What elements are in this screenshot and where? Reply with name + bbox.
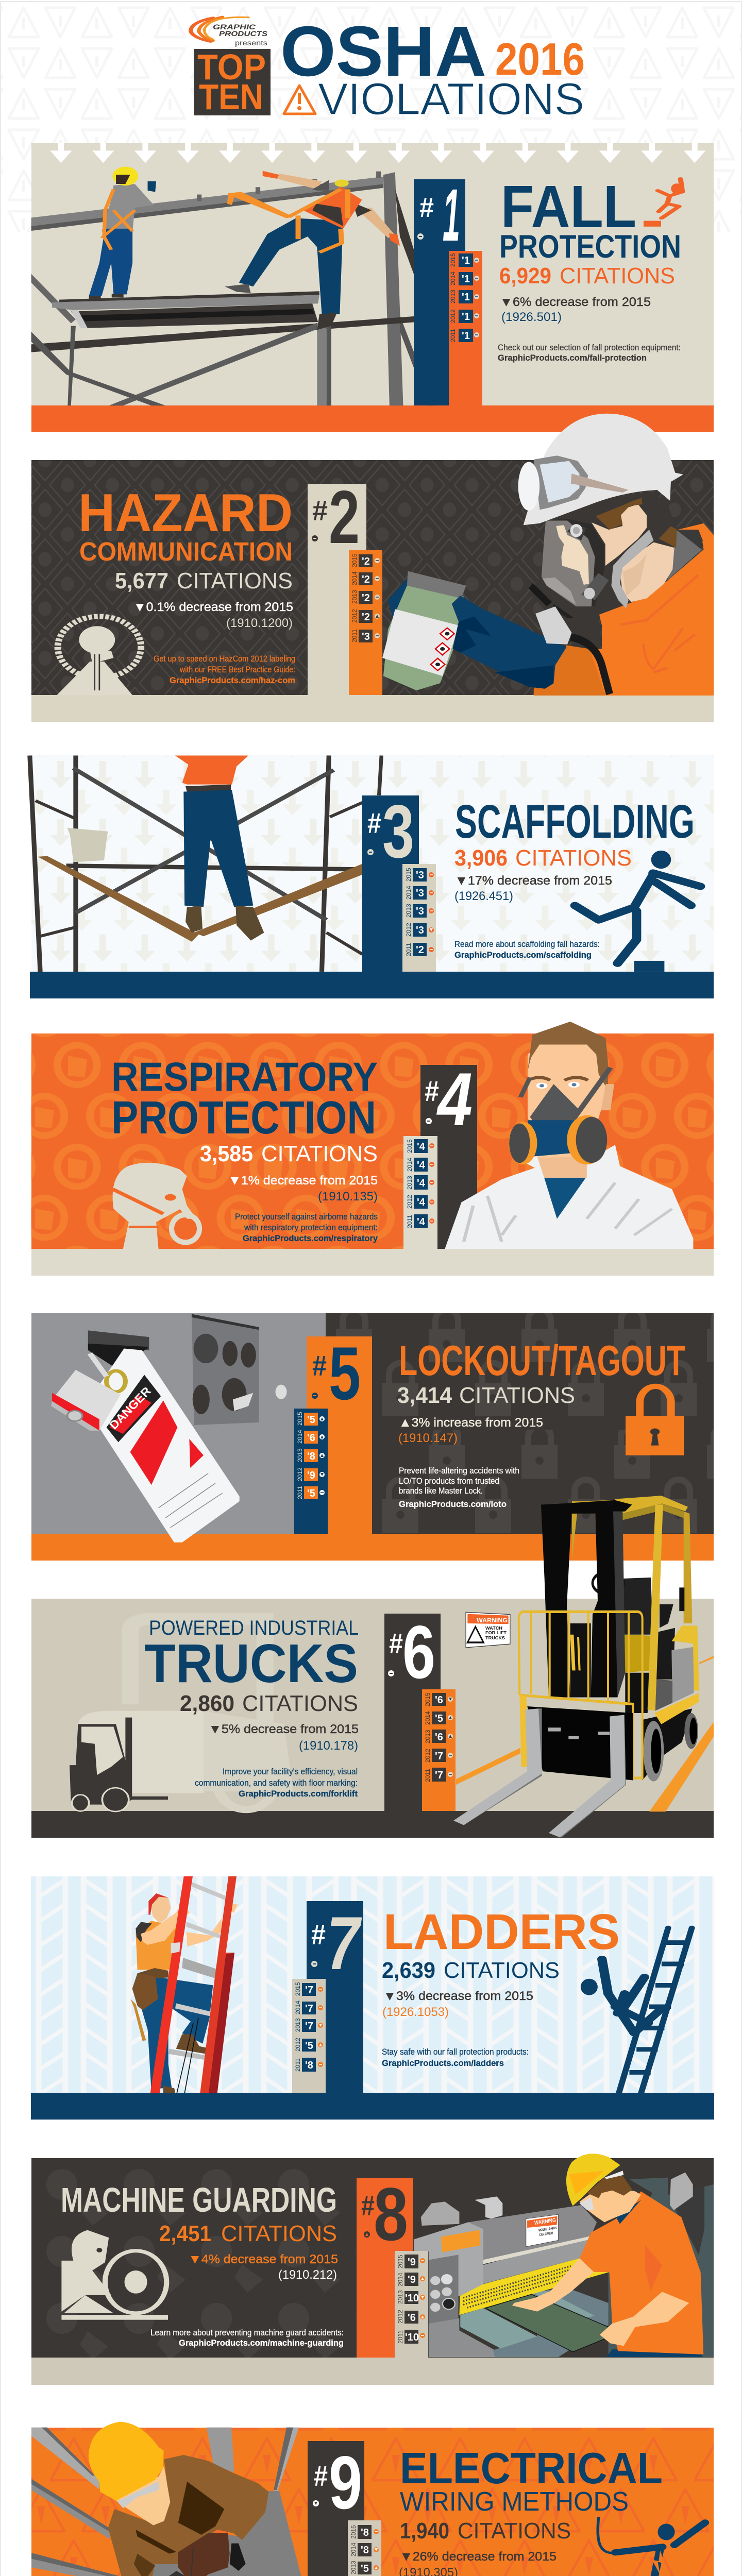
standard number: (1910.147) — [398, 1431, 458, 1445]
heading: COMMUNICATION — [79, 537, 293, 566]
illustration: worker at shear machine — [414, 2154, 714, 2357]
rank history: '2 — [362, 574, 370, 585]
illustration: worker in suit and face shield — [452, 414, 714, 696]
panel 8: machine guarding — [31, 2154, 714, 2385]
rank history: 2012 — [397, 2310, 404, 2324]
rank history: '7 — [435, 1770, 443, 1781]
rank history: '7 — [435, 1751, 443, 1762]
rank history: 2012 — [294, 2038, 301, 2052]
warning sign text: WARNING — [534, 2217, 556, 2226]
rank tower: 7 — [327, 1901, 362, 1985]
heading: ELECTRICAL — [400, 2444, 663, 2493]
citations — [180, 1691, 358, 1716]
citations — [200, 1141, 378, 1166]
rank history — [395, 2251, 428, 2358]
panel 7: ladders — [31, 1876, 714, 2120]
panel 2: hazard communication — [31, 414, 714, 722]
rank history: '5 — [307, 1414, 315, 1426]
citations: 2,860 — [180, 1691, 234, 1716]
rank history: '6 — [435, 1694, 443, 1706]
rank history: '3 — [416, 870, 424, 881]
citations — [397, 1383, 575, 1408]
citations — [159, 2221, 337, 2246]
citations: CITATIONS — [221, 2221, 337, 2246]
icon: falling person — [644, 179, 682, 227]
link text: brands like Master Lock. — [399, 1486, 483, 1496]
rank history: '8 — [307, 1451, 315, 1462]
rank history: '3 — [416, 888, 424, 899]
rank history: '7 — [305, 2003, 313, 2014]
rank history — [422, 1689, 456, 1811]
logo: graphic products small: GRAPHIC — [213, 23, 256, 31]
link text: LO/TO products from trusted — [399, 1476, 499, 1486]
citations: 1,940 — [400, 2518, 449, 2544]
link text: Get up to speed on HazCom 2012 labeling — [154, 654, 295, 664]
change stat: ▼0.1% decrease from 2015 — [133, 600, 293, 614]
link text: Protect yourself against airborne hazards — [235, 1212, 378, 1222]
rank history: 2013 — [296, 1448, 303, 1462]
standard number: (1926.451) — [454, 889, 513, 903]
rank history: 2011 — [449, 329, 457, 342]
standard number: (1910.1200) — [226, 616, 293, 630]
heading: WIRING METHODS — [400, 2487, 629, 2517]
rank history: '1 — [462, 292, 470, 303]
rank history: '10 — [405, 2332, 419, 2343]
rank history: '6 — [435, 1732, 443, 1743]
rank history: '6 — [408, 2312, 416, 2324]
citations: CITATIONS — [177, 568, 293, 594]
link text: Prevent life-altering accidents with — [399, 1466, 519, 1476]
panel 6: powered industrial trucks — [31, 1496, 714, 1838]
rank history: 2015 — [294, 1982, 301, 1996]
rank tower: 8 — [374, 2172, 408, 2256]
illustration: chemical jar — [382, 571, 466, 690]
citations: 3,906 — [454, 845, 508, 871]
heading — [78, 483, 293, 566]
rank history: 2014 — [449, 272, 457, 285]
rank tower — [308, 475, 366, 695]
rank history: 2012 — [296, 1467, 303, 1481]
standard number: (1926.1053) — [382, 2005, 449, 2019]
rank history: 2011 — [397, 2330, 404, 2344]
citations: 2,451 — [159, 2221, 211, 2246]
link text: with respiratory protection equipment: — [244, 1223, 378, 1232]
warning sign text: CAN CRUSH — [539, 2232, 553, 2237]
change stat: ▼4% decrease from 2015 — [189, 2252, 338, 2266]
icon: padlock — [626, 1386, 684, 1455]
logo: graphic products small: presents — [235, 39, 267, 47]
rank history: '5 — [435, 1713, 443, 1724]
rank history: 2012 — [351, 609, 358, 623]
rank history — [402, 864, 436, 972]
rank history — [403, 1136, 437, 1249]
header — [191, 12, 585, 124]
change stat: ▲3% increase from 2015 — [399, 1416, 543, 1430]
link text: GraphicProducts.com/forklift — [239, 1789, 358, 1799]
rank history: 2012 — [424, 1749, 431, 1762]
rank history: '4 — [417, 1216, 426, 1228]
heading: RESPIRATORY — [111, 1054, 378, 1099]
citations — [454, 845, 632, 871]
rank history: '4 — [417, 1141, 426, 1153]
rank history: '1 — [462, 311, 470, 323]
citations — [382, 1958, 560, 1983]
citations: 5,677 — [115, 568, 168, 594]
illustration: worker climbing red ladder — [130, 1876, 238, 2093]
rank tower: # — [311, 1918, 326, 1951]
illustration: electrician wiring from above — [31, 2422, 307, 2576]
icon: forklift silhouette — [70, 1718, 168, 1811]
citations: CITATIONS — [242, 1691, 358, 1716]
heading: HAZARD — [78, 483, 293, 543]
change stat: ▼26% decrease from 2015 — [400, 2550, 556, 2564]
rank history — [294, 1409, 328, 1534]
rank tower: 6 — [402, 1610, 435, 1694]
top ten badge — [194, 47, 271, 117]
rank tower: 1 — [443, 174, 460, 257]
rank history: 2014 — [406, 1158, 413, 1172]
rank history: '4 — [417, 1197, 426, 1208]
change stat: ▼3% decrease from 2015 — [383, 1989, 533, 2003]
rank history: 2013 — [449, 290, 457, 303]
rank history: '5 — [307, 1488, 315, 1499]
link text — [454, 939, 600, 960]
logo: graphic products small: PRODUCTS — [219, 29, 268, 38]
rank history: '1 — [462, 274, 470, 285]
link text: with our FREE Best Practice Guide: — [179, 665, 295, 674]
rank tower: # — [312, 494, 328, 527]
citations: CITATIONS — [458, 2518, 571, 2544]
rank history: 2011 — [405, 943, 412, 956]
rank history: '1 — [462, 255, 470, 266]
citations: CITATIONS — [459, 1383, 575, 1408]
warning floor sign: FOR LIFT — [485, 1631, 507, 1635]
change stat: ▼6% decrease from 2015 — [500, 295, 651, 309]
link text: GraphicProducts.com/haz-com — [170, 675, 295, 685]
rank history: 2015 — [406, 1139, 413, 1153]
rank history: '8 — [361, 2527, 369, 2538]
danger tag word: DANGER — [107, 1384, 154, 1432]
rank history: '9 — [408, 2274, 416, 2285]
illustration: control panel and danger tag — [51, 1314, 287, 1543]
rank tower: 2 — [329, 475, 360, 559]
rank history: 2014 — [397, 2273, 404, 2286]
rank history: 2011 — [406, 1215, 413, 1228]
rank history: 2013 — [405, 904, 412, 918]
change stat: ▼5% decrease from 2015 — [209, 1722, 359, 1736]
rank history: 2013 — [406, 1176, 413, 1190]
icon: slipping person — [575, 851, 700, 972]
rank tower: # — [419, 192, 434, 223]
top ten badge: TOP — [197, 47, 266, 87]
rank history: '3 — [416, 925, 424, 936]
link text: Learn more about preventing machine guard accidents: — [150, 2328, 344, 2337]
rank tower: # — [312, 1349, 327, 1382]
rank history: 2013 — [351, 590, 358, 604]
standard number: (1910.178) — [299, 1739, 358, 1753]
rank tower — [307, 1901, 363, 2093]
rank tower — [362, 789, 419, 972]
warning floor sign: WARNING — [477, 1617, 508, 1624]
link text — [399, 1466, 519, 1509]
rank history: 2012 — [405, 923, 412, 937]
warning floor sign — [466, 1612, 510, 1648]
rank history: '6 — [307, 1432, 315, 1444]
rank history: 2013 — [424, 1730, 431, 1743]
rank history: 2013 — [294, 2018, 301, 2032]
warning sign text — [534, 2217, 558, 2238]
citations: CITATIONS — [444, 1958, 560, 1983]
citations — [400, 2518, 571, 2544]
rank tower: # — [314, 2460, 328, 2492]
rank history: '8 — [305, 2060, 313, 2071]
standard number: (1910.212) — [278, 2268, 337, 2282]
icon: falling ladder — [581, 1928, 692, 2093]
link text: GraphicProducts.com/ladders — [382, 2058, 504, 2068]
icon: respirator head — [113, 1163, 202, 1249]
heading — [499, 173, 681, 265]
title VIOLATIONS: VIOLATIONS — [318, 74, 584, 124]
heading: PROTECTION — [111, 1092, 376, 1144]
rank tower — [420, 1057, 477, 1249]
rank tower: 5 — [329, 1331, 361, 1415]
standard number: (1926.501) — [501, 310, 562, 324]
rank history — [349, 550, 382, 695]
panel 9: electrical wiring methods — [31, 2422, 714, 2576]
rank tower: 4 — [436, 1057, 473, 1141]
heading: POWERED INDUSTRIAL — [149, 1617, 359, 1639]
link text — [195, 1767, 358, 1799]
warning floor sign: TRUCKS — [485, 1636, 505, 1640]
down arrows row — [50, 143, 705, 163]
rank history: '5 — [361, 2563, 369, 2574]
panel 4: respiratory protection — [31, 1022, 714, 1276]
link text — [235, 1212, 378, 1243]
link text: Check out our selection of fall protection equipment: — [498, 343, 681, 352]
illustration: worker on scaffold plank — [30, 755, 381, 972]
citations: CITATIONS — [261, 1141, 378, 1166]
rank history: 2013 — [350, 2561, 357, 2574]
rank tower — [384, 1610, 441, 1811]
panel 3: scaffolding — [30, 755, 714, 998]
heading — [400, 2444, 663, 2517]
heading: FALL — [501, 173, 636, 240]
citations: 3,414 — [397, 1383, 452, 1408]
rank history: '9 — [408, 2257, 416, 2268]
rank tower: 9 — [329, 2441, 362, 2524]
panel 5: lockout tagout — [31, 1313, 714, 1561]
rank history: '7 — [305, 2021, 313, 2032]
rank history: 2014 — [351, 571, 358, 585]
rank history: 2014 — [294, 2001, 301, 2014]
rank tower: 3 — [382, 789, 414, 873]
rank history: 2012 — [406, 1195, 413, 1209]
link text: GraphicProducts.com/loto — [399, 1499, 507, 1509]
citations: CITATIONS — [560, 263, 675, 289]
rank history: '8 — [361, 2545, 369, 2556]
rank history: 2015 — [449, 253, 457, 267]
ghost forklift background — [78, 1619, 293, 1809]
rank history: 2015 — [296, 1412, 303, 1426]
rank history: '5 — [305, 2040, 313, 2052]
rank history: '2 — [362, 612, 370, 623]
link text: Read more about scaffolding fall hazards: — [454, 939, 600, 949]
link text: Improve your facility's efficiency, visual — [223, 1767, 358, 1776]
link text: GraphicProducts.com/scaffolding — [454, 950, 592, 960]
link text: GraphicProducts.com/respiratory — [243, 1233, 378, 1243]
rank history: 2015 — [351, 553, 358, 567]
illustration: yellow forklift — [453, 1496, 714, 1837]
rank history: '1 — [462, 330, 470, 342]
rank history: 2011 — [296, 1486, 303, 1499]
illustration: worker with respirator — [445, 1022, 693, 1249]
rank history: 2012 — [449, 309, 457, 323]
link text: Stay safe with our fall protection products: — [382, 2047, 529, 2057]
icon: warning triangle — [284, 86, 315, 114]
link text: GraphicProducts.com/fall-protection — [498, 353, 647, 363]
title year: 2016 — [495, 33, 585, 84]
logo: graphic products small — [191, 17, 268, 47]
rank history: '7 — [305, 1985, 313, 1996]
rank history: 2015 — [350, 2525, 357, 2539]
rank history: 2014 — [405, 886, 412, 900]
rank history: 2011 — [424, 1769, 431, 1782]
citations: CITATIONS — [515, 845, 632, 871]
link text: GraphicProducts.com/machine-guarding — [179, 2338, 344, 2348]
link text — [154, 654, 295, 685]
citations: 6,929 — [499, 263, 551, 289]
standard number: (1910.135) — [318, 1190, 378, 1204]
title OSHA: OSHA — [280, 12, 486, 91]
rank history: '3 — [416, 906, 424, 917]
rank tower — [357, 2172, 413, 2358]
rank tower — [307, 1331, 372, 1534]
change stat: ▼17% decrease from 2015 — [455, 874, 612, 888]
top ten badge: TEN — [199, 77, 263, 117]
rank history: '3 — [362, 631, 370, 642]
citations — [115, 568, 293, 594]
rank history — [449, 251, 482, 405]
rank history: 2014 — [350, 2543, 357, 2556]
rank history: 2011 — [351, 629, 358, 642]
rank history: '2 — [362, 556, 370, 567]
rank tower: # — [425, 1075, 439, 1107]
panel 1: fall protection — [31, 143, 714, 432]
heading: TRUCKS — [144, 1633, 358, 1694]
link text — [150, 2328, 344, 2348]
heading: LADDERS — [383, 1904, 620, 1960]
citations — [499, 263, 675, 289]
rank tower: # — [367, 807, 381, 839]
rank history — [292, 1979, 326, 2093]
rank history: '2 — [416, 944, 424, 956]
warning floor sign: WATCH — [485, 1626, 502, 1631]
citations: 3,585 — [200, 1141, 253, 1166]
rank history: 2013 — [397, 2290, 404, 2304]
rank history: '4 — [417, 1160, 426, 1171]
rank tower — [414, 174, 465, 405]
icon: machine entanglement — [61, 2230, 168, 2320]
link text: communication, and safety with floor marking: — [195, 1778, 358, 1788]
link text — [382, 2047, 529, 2068]
rank history: 2011 — [294, 2058, 301, 2072]
rank history: 2015 — [424, 1692, 431, 1706]
rank history: 2015 — [397, 2255, 404, 2268]
rank tower — [308, 2441, 364, 2576]
link text — [498, 343, 681, 363]
rank tower: # — [389, 1627, 403, 1659]
icon: inhalation hazard — [57, 616, 141, 695]
rank history: '4 — [417, 1178, 426, 1189]
rank tower: # — [361, 2189, 375, 2222]
rank history: '2 — [362, 592, 370, 604]
rank history: '10 — [405, 2293, 419, 2304]
heading — [111, 1054, 378, 1144]
illustration: scaffolding and two workers — [31, 166, 434, 405]
change stat: ▼1% decrease from 2015 — [228, 1174, 378, 1188]
rank history: '9 — [307, 1470, 315, 1481]
rank history: 2014 — [296, 1430, 303, 1444]
citations: 2,639 — [382, 1958, 435, 1983]
rank history: 2014 — [424, 1711, 431, 1725]
heading: PROTECTION — [499, 229, 681, 265]
rank history — [348, 2520, 381, 2576]
heading: MACHINE GUARDING — [61, 2181, 337, 2219]
icon: electric shock figure — [598, 2517, 705, 2576]
rank history: 2015 — [405, 868, 412, 882]
warning sign text: MOVING PARTS — [538, 2226, 558, 2232]
